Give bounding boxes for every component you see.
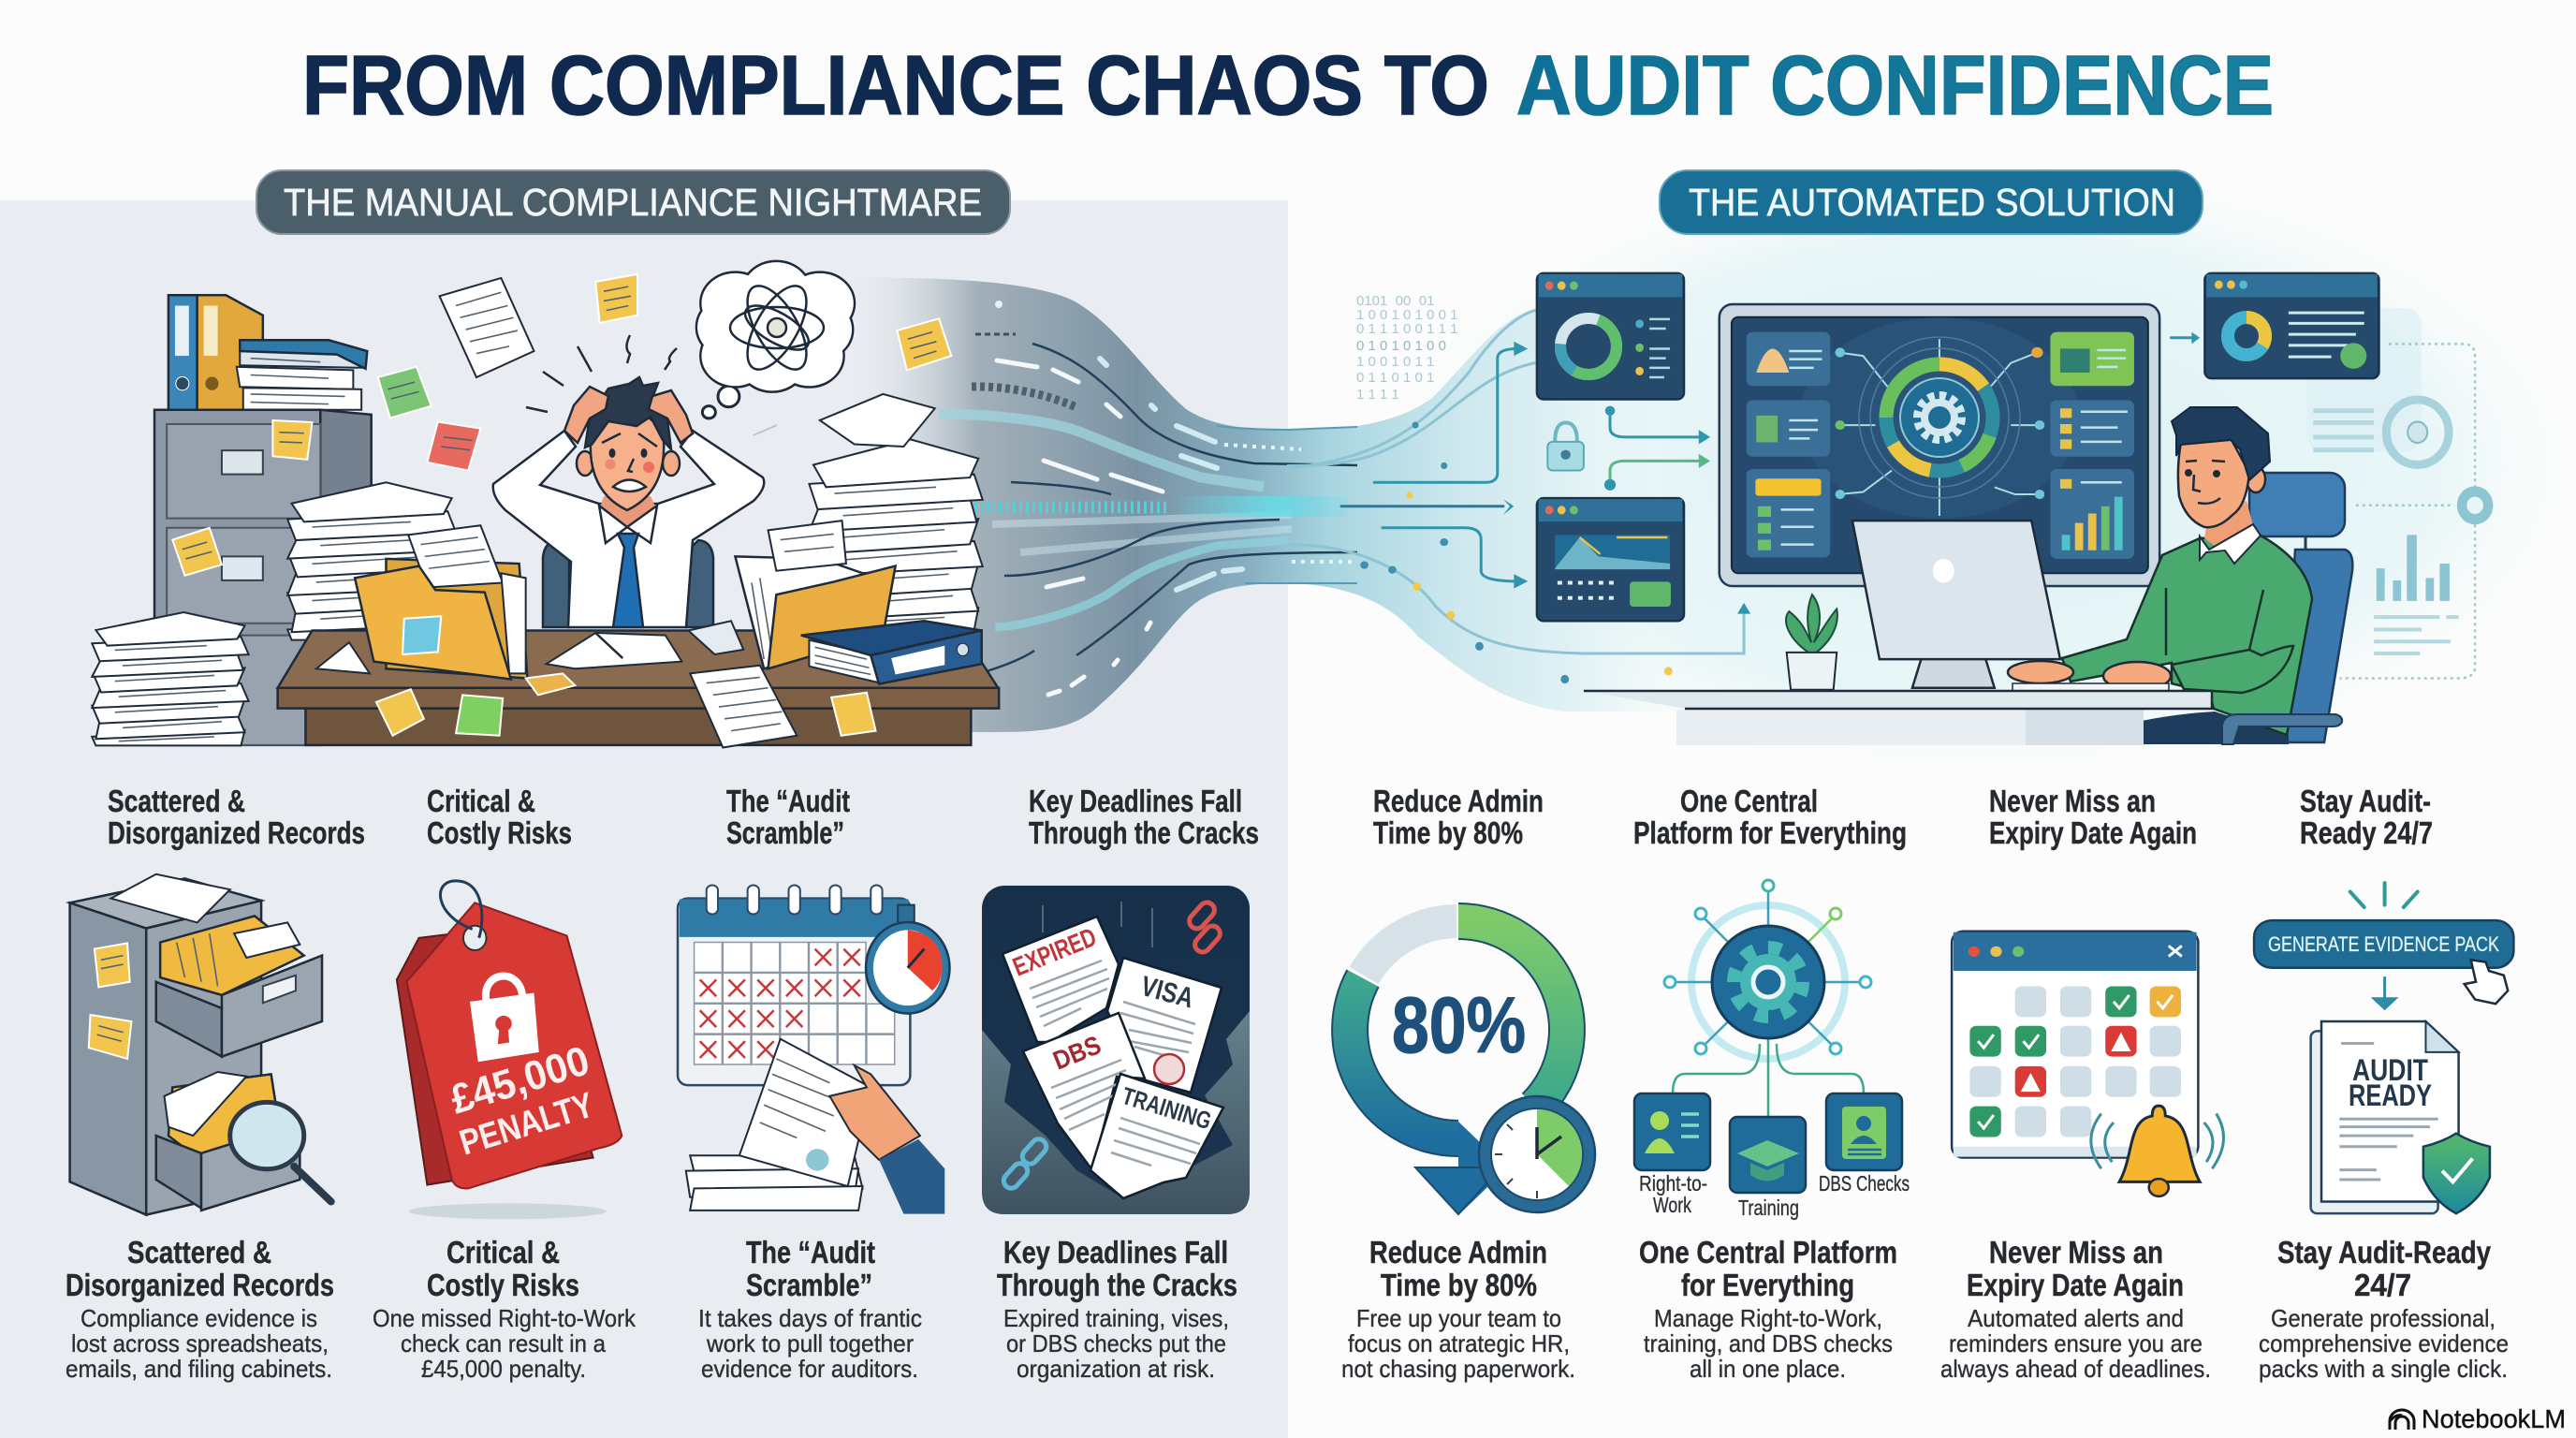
card heading [2300,784,2433,850]
panel: card expiry date [1940,784,2223,1383]
card text: not chasing paperwork. [1341,1355,1575,1383]
module: dbs checks [1826,1093,1902,1170]
card heading: Reduce Admin [1373,784,1544,818]
card text: all in one place. [1690,1355,1846,1383]
card text: work to pull together [706,1329,914,1357]
paper stack: centre left [287,482,456,640]
window pie chart [2228,317,2265,355]
card text: check can result in a [401,1329,606,1357]
lock icon [1547,423,1584,471]
stream lines and arrows [1288,311,2196,653]
icon: documents falling into dark crack: EXPIRED [1009,922,1100,982]
card heading: Time by 80% [1373,815,1523,850]
desk sticky notes [376,673,876,736]
binary digits: 0101 00 01 [1356,293,1434,309]
title: FROM COMPLIANCE CHAOS TO [302,39,1489,133]
window donut chart [1550,308,1627,385]
wooden desk [278,630,999,745]
card text: for Everything [1681,1268,1854,1302]
panel: card costly risks [373,784,637,1383]
panel: card scattered records [66,784,365,1383]
binary digits: 0 1 1 0 1 0 1 [1356,370,1434,386]
module labels: Work [1653,1193,1691,1217]
card text: Time by 80% [1381,1268,1537,1302]
card text: Free up your team to [1356,1304,1561,1332]
left folder with documents [355,525,527,680]
card heading: Ready 24/7 [2300,815,2433,850]
card text: organization at risk. [1017,1355,1215,1383]
binders on cabinet [168,295,367,410]
card text: Generate professional, [2271,1304,2496,1332]
card text: Disorganized Records [66,1268,334,1302]
card text [2259,1235,2509,1383]
card heading: Scramble” [726,815,844,850]
card heading [108,784,365,850]
heading pill: manual nightmare: THE MANUAL COMPLIANCE NIGHTMARE [284,181,982,224]
card text: reminders ensure you are [1949,1329,2203,1357]
icon: marked calendar, stopwatch and hand with paper [678,886,950,1214]
binary digits: 0 1 0 1 0 1 0 0 [1356,338,1446,354]
paper stack: bottom left [92,612,249,745]
panel: automated side tint [1385,159,2576,777]
card text: Never Miss an [1989,1235,2163,1269]
card text: One Central Platform [1639,1235,1897,1269]
card heading [1029,784,1259,850]
title [302,39,2274,133]
stream data dots [1360,422,1673,683]
icon: documents falling into dark crack: DBS [1049,1030,1105,1076]
heading pill: manual nightmare [256,170,1010,234]
icon: 80 percent ring with clock: 80% [1392,981,1526,1069]
tangled atom in thought bubble [730,277,824,378]
icon: central gear hub with three modules [1634,880,1910,1220]
card text: Compliance evidence is [80,1304,317,1332]
icon: generate evidence button and audit ready document: READY [2349,1078,2432,1112]
card text: Scattered & [127,1235,271,1269]
module labels: Right-to- [1639,1171,1707,1196]
dashboard window: pie [2204,273,2378,378]
data stream funnel [842,278,1685,732]
card heading: Disorganized Records [108,815,365,850]
card heading: Expiry Date Again [1989,815,2197,850]
card text [997,1235,1237,1383]
module labels: DBS Checks [1819,1171,1910,1196]
module labels [1639,1171,1910,1220]
green arrowhead [1699,454,1710,468]
card text: always ahead of deadlines. [1940,1355,2211,1383]
card heading [1989,784,2197,850]
desktop computer rear [1852,521,2060,688]
card text: Critical & [446,1235,560,1269]
icon: documents falling into dark crack: TRAINING [1119,1081,1215,1135]
card heading: The “Audit [726,784,850,818]
card text: lost across spreadsheats, [71,1329,329,1357]
card text: evidence for auditors. [701,1355,918,1383]
arrowheads [1503,332,2200,614]
module: right to work [1634,1093,1710,1170]
panel: card audit scramble [678,784,950,1383]
binary digits: 0 1 1 1 0 0 1 1 1 [1356,321,1457,337]
papers on desk [316,621,797,747]
module: training [1730,1117,1806,1193]
icon: documents falling into dark crack: VISA [1137,971,1197,1015]
card text [1639,1235,1897,1383]
card heading [1373,784,1544,850]
card text: Scramble” [746,1268,872,1302]
card text: comprehensive evidence [2259,1329,2509,1357]
icon: red penalty price tag: £45,000 [446,1037,594,1123]
card text: Expired training, vises, [1003,1304,1229,1332]
card text: It takes days of frantic [698,1304,922,1332]
binary digits: 1 1 1 1 [1356,387,1399,403]
chair arm [2222,714,2342,744]
panel: card reduce admin [1341,784,1595,1383]
card heading: Key Deadlines Fall [1029,784,1242,818]
blue binder on desk [801,621,982,684]
module labels: Training [1738,1196,1799,1220]
large monitor dashboard [1720,304,2159,586]
thought bubble [696,261,855,418]
card text: Through the Cracks [997,1268,1237,1302]
stress marks [526,335,677,412]
illustration: automated platform and happy worker [1288,273,2493,745]
card heading: Platform for Everything [1633,815,1907,850]
card text [1940,1235,2211,1383]
flying sheet on stack [820,394,935,447]
card heading: Through the Cracks [1029,815,1259,850]
card text: Stay Audit-Ready [2277,1235,2492,1269]
central gear ring on monitor [1859,337,2020,498]
stressed worker [493,377,777,627]
panel: manual side background [0,200,1288,1438]
filing cabinet behind desk [154,410,372,745]
card text: 24/7 [2354,1268,2411,1302]
card text: focus on atrategic HR, [1348,1329,1570,1357]
card heading: One Central [1680,784,1818,818]
heading pill: automated solution: THE AUTOMATED SOLUTION [1689,181,2175,224]
icon: red penalty price tag [397,881,622,1219]
dashboard window: donut [1537,273,1684,400]
card heading: Stay Audit- [2300,784,2431,818]
icon: generate evidence button and audit ready document [2254,883,2513,1213]
happy worker [2008,407,2312,744]
card text: Reduce Admin [1369,1235,1547,1269]
office chair [2249,473,2352,742]
card text: Automated alerts and [1968,1304,2184,1332]
card text: packs with a single click. [2259,1355,2508,1383]
card text: Expiry Date Again [1967,1268,2184,1302]
icon: documents falling into dark crack [982,886,1250,1214]
binary digits: 1 0 0 1 0 1 0 0 1 [1356,307,1457,323]
icon: open filing cabinet with magnifier [70,874,331,1215]
card text: One missed Right-to-Work [373,1304,637,1332]
NotebookLM logo: NotebookLM [2422,1404,2566,1433]
icon: 80 percent ring with clock [1350,921,1595,1215]
card text [66,1235,334,1383]
title: AUDIT CONFIDENCE [1516,39,2274,133]
white desk [1584,691,2212,745]
card text: The “Audit [746,1235,875,1269]
paper stack: right [809,439,983,630]
card text: or DBS checks put the [1006,1329,1226,1357]
binary digits: 1 0 0 1 0 1 1 [1356,354,1434,370]
card text [1341,1235,1575,1383]
flying sticky notes [378,274,951,471]
card heading: Scattered & [108,784,245,818]
card heading [427,784,572,850]
icon: alert calendar with bell [1952,932,2223,1196]
binary digits [1356,293,1457,403]
card text [698,1235,922,1383]
panel: card audit ready [2254,784,2513,1383]
card heading [1633,784,1907,850]
card heading: Costly Risks [427,815,572,850]
icon: red penalty price tag: PENALTY [455,1085,598,1164]
icon: generate evidence button and audit ready document: GENERATE EVIDENCE PACK [2268,932,2499,956]
card text: £45,000 penalty. [421,1355,586,1383]
card text [373,1235,637,1383]
card text: Manage Right-to-Work, [1654,1304,1882,1332]
heading pill: automated solution [1660,170,2203,234]
faint dotted connectors and background charts [2306,308,2493,678]
flying paper [440,278,534,377]
dashboard window: line chart [1537,498,1684,621]
right folder with documents [735,521,896,668]
card heading: Never Miss an [1989,784,2156,818]
card text: Costly Risks [427,1268,579,1302]
card heading: Critical & [427,784,535,818]
card heading [726,784,850,850]
desk plant [1786,594,1837,690]
card text: Key Deadlines Fall [1003,1235,1228,1269]
illustration: stressed worker at messy desk [92,261,999,747]
panel: card missed deadlines [982,784,1259,1383]
card text: emails, and filing cabinets. [66,1355,332,1383]
card text: training, and DBS checks [1644,1329,1893,1357]
panel: card central platform [1633,784,1910,1383]
icon: generate evidence button and audit ready document: AUDIT [2352,1053,2428,1087]
